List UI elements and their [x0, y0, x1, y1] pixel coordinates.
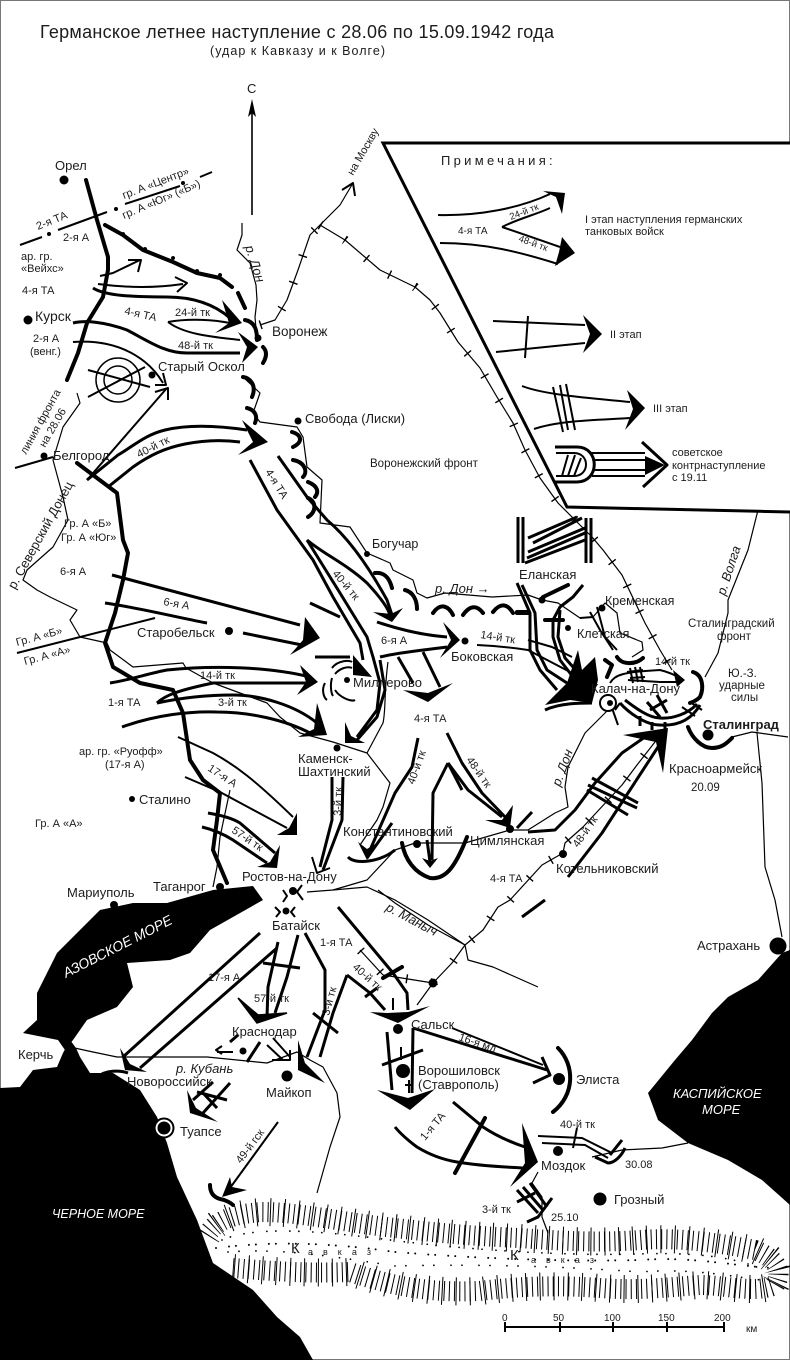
city: Elista: Элиста	[576, 1072, 620, 1087]
army and unit labels: centre: 40-й тк	[406, 749, 429, 786]
Millerovo pocket	[323, 661, 355, 701]
army and unit labels: north: 24-й тк	[175, 307, 210, 319]
front lines and army-group boundaries	[15, 172, 245, 883]
army and unit labels: centre: 17-я А	[205, 762, 240, 790]
army and unit labels: south: 40-й тк	[560, 1119, 595, 1131]
legend: stage I: 4-я ТА	[458, 226, 488, 237]
city: Krasnodar: Краснодар	[232, 1024, 297, 1039]
city: Tuapse: Туапсе	[180, 1124, 222, 1139]
city: Kamensk-Shakhtinsky	[298, 744, 371, 779]
city: Voroshilovsk	[396, 1063, 500, 1092]
city: Elanskaya: Еланская	[519, 567, 576, 582]
legend: stage I: 48-й тк	[517, 233, 550, 254]
city: Kalach-on-Don	[591, 681, 681, 711]
army and unit labels: north: Воронежский фронт	[370, 458, 479, 470]
city: Tsimlyanskaya	[470, 825, 544, 848]
army and unit labels: north: (венг.)	[30, 346, 61, 358]
army and unit labels: Stalingrad area: ударные	[719, 680, 765, 692]
legend: Soviet counter-offensive: с 19.11	[672, 472, 707, 484]
legend: stage II	[493, 315, 642, 358]
army and unit labels: south: 25.10	[551, 1212, 579, 1224]
legend: stage III	[522, 384, 688, 432]
legend: Soviet counter-offensive: советское	[672, 447, 723, 459]
railways	[260, 183, 672, 1005]
sea labels: АЗОВСКОЕ МОРЕ	[59, 911, 175, 981]
arrow: 16th motorised division to Elista	[413, 1028, 570, 1112]
legend heading: Примечания:	[441, 153, 556, 168]
Caucasus labels: авказ	[531, 1255, 604, 1265]
army and unit labels: north: гр. А «Юг» («Б»)	[120, 178, 202, 222]
scale bar: км	[746, 1324, 757, 1335]
army and unit labels: south: 16-я мд	[457, 1031, 498, 1056]
army and unit labels: south: 57-й тк	[254, 993, 289, 1005]
city: Bataysk	[272, 908, 320, 933]
arrow: 40th corps at Mozdok	[538, 1128, 625, 1163]
army and unit labels: north: 2-я ТА	[35, 209, 70, 233]
army and unit labels: south: 40-й тк	[350, 961, 384, 994]
army and unit labels: north: «Вейхс»	[21, 263, 64, 275]
Caucasus labels: К	[510, 1247, 519, 1264]
arrow: 40th panzer corps	[87, 420, 268, 487]
city: Stary Oskol: Старый Оскол	[158, 359, 245, 374]
scale bar: 150	[658, 1313, 675, 1324]
army and unit labels: south: 1-я ТА	[320, 937, 353, 949]
arrows: 40th corps and pocket at Konstantinovsky	[348, 738, 467, 878]
Caucasus labels	[291, 1240, 604, 1265]
Caspian Sea	[648, 950, 790, 1205]
city: Mozdok: Моздок	[541, 1158, 586, 1173]
army and unit labels: Stalingrad area: фронт	[717, 631, 752, 643]
city: Kalach-on-Don: Калач-на-Дону	[591, 681, 681, 696]
army and unit labels: centre: 40-й тк	[330, 568, 361, 603]
city: Stalingrad: Сталинград	[703, 717, 780, 732]
city: Astrakhan	[697, 938, 786, 954]
Soviet counter-offensive from Elanskaya	[517, 517, 643, 710]
Sea of Azov	[23, 886, 263, 1050]
army and unit labels: north: 2-я А	[33, 333, 60, 345]
army and unit labels: centre: 4-я ТА	[490, 873, 523, 885]
army and unit labels: centre: 48-й тк	[464, 755, 494, 791]
army and unit labels: Stalingrad area: 14-й тк	[480, 629, 516, 646]
scale bar: 200	[714, 1313, 731, 1324]
city: Kamensk-Shakhtinsky: Шахтинский	[298, 764, 371, 779]
river labels: р. Северский Донец	[5, 478, 76, 591]
army and unit labels: centre: Гр. А «Б»	[64, 518, 111, 530]
city: Mariupol	[67, 885, 135, 909]
city: Grozny: Грозный	[614, 1192, 664, 1207]
arrows: 6th army	[105, 575, 320, 655]
arrow: 3rd corps south of Mozdok	[517, 1183, 552, 1222]
city: Bataysk: Батайск	[272, 918, 320, 933]
city: Krasnoarmeysk	[669, 761, 762, 794]
city: Salsk	[393, 1017, 455, 1034]
army and unit labels: south: 1-я ТА	[418, 1110, 449, 1143]
destroyed Soviet pocket near Stary Oskol	[88, 358, 150, 402]
legend: stage III: III этап	[653, 403, 688, 415]
river labels: р. Кубань	[175, 1061, 233, 1076]
river labels: р. Волга	[713, 544, 744, 598]
city: Rostov-on-Don: Ростов-на-Дону	[242, 869, 337, 884]
arrow: 1st panzer army to Mozdok	[395, 1102, 538, 1187]
city: Salsk: Сальск	[411, 1017, 455, 1032]
army and unit labels: north: на 28.06	[37, 406, 69, 450]
north arrow	[247, 81, 256, 215]
legend: stage II: II этап	[610, 329, 642, 341]
army and unit labels: south: 49-й гск	[234, 1127, 267, 1166]
city: Krasnodar	[232, 1024, 297, 1054]
Black Sea	[0, 1040, 313, 1360]
army and unit labels: north: 4-я ТА	[22, 285, 55, 297]
army and unit labels: centre: Гр. А «А»	[23, 644, 72, 668]
legend: stage I: 24-й тк	[508, 201, 541, 223]
army and unit labels: centre: ар. гр. «Руофф»	[79, 746, 163, 758]
city: Novorossiysk	[98, 1071, 212, 1089]
title: (удар к Кавказу и к Волге)	[210, 44, 385, 58]
city: Maykop	[266, 1070, 312, 1100]
legend: Soviet counter-offensive	[555, 442, 765, 487]
city: Maykop: Майкоп	[266, 1085, 312, 1100]
Caucasus mountains	[207, 1212, 778, 1291]
army and unit labels: centre: 48-й тк	[571, 814, 601, 850]
city: Elanskaya	[519, 567, 576, 604]
army and unit labels: centre: (17-я А)	[105, 759, 145, 771]
arrows: 14th and 3rd panzer corps	[110, 665, 327, 737]
arrow: 48th corps to Krasnoarmeysk	[522, 728, 668, 917]
river labels: р. Дон	[548, 747, 576, 789]
city: Krasnoarmeysk: Красноармейск	[669, 761, 762, 776]
city: Kerch: Керчь	[18, 1047, 54, 1062]
city: Tsimlyanskaya: Цимлянская	[470, 833, 544, 848]
arrows: 4th panzer army south along the Don	[250, 456, 403, 743]
city: Konstantinovsky: Константиновский	[343, 824, 453, 839]
city: Stalingrad	[702, 717, 780, 740]
army and unit labels: centre: 6-я А	[60, 566, 87, 578]
army and unit labels: centre: Гр. А «А»	[35, 818, 83, 830]
sea labels: МОРЕ	[702, 1102, 741, 1117]
arrow: 49th mountain corps	[210, 1122, 278, 1205]
sea labels: ЧЕРНОЕ МОРЕ	[52, 1207, 145, 1221]
army and unit labels: north: 40-й тк	[135, 434, 172, 461]
army and unit labels: centre: 6-я А	[381, 635, 408, 647]
army and unit labels: north: гр. А «Центр»	[121, 165, 191, 202]
army and unit labels: south: 3-й тк	[320, 986, 339, 1017]
scale bar: 0	[502, 1313, 508, 1324]
scale bar: 50	[553, 1313, 565, 1324]
rivers	[23, 223, 788, 1233]
sea labels	[52, 911, 762, 1221]
arrow: 3rd panzer corps to Rostov	[312, 777, 343, 873]
city: Stary Oskol	[148, 359, 245, 378]
army and unit labels: centre: Гр. А «Юг»	[61, 532, 116, 544]
city: Voronezh	[254, 324, 327, 342]
city: Stalino: Сталино	[139, 792, 191, 807]
army and unit labels: centre: 57-й тк	[229, 825, 265, 854]
army and unit labels: Stalingrad area: Сталинградский	[688, 618, 775, 630]
army and unit labels: south: 30.08	[625, 1159, 653, 1171]
city: Rostov-on-Don	[242, 869, 337, 895]
army and unit labels: north	[18, 126, 479, 502]
sea labels: КАСПИЙСКОЕ	[673, 1085, 762, 1101]
city: Boguchar	[364, 537, 418, 557]
army and unit labels: south: 3-й тк	[482, 1204, 511, 1216]
army and unit labels: north: 4-я ТА	[123, 305, 158, 324]
city: Voroshilovsk: Ворошиловск	[418, 1063, 500, 1078]
army and unit labels: Stalingrad area: 14-й тк	[655, 656, 690, 668]
Caucasus labels: авказ	[308, 1247, 381, 1257]
city: Astrakhan: Астрахань	[697, 938, 760, 953]
army and unit labels: north: линия фронта	[18, 387, 64, 456]
north arrow: С	[247, 81, 256, 96]
city: Voronezh: Воронеж	[272, 324, 327, 339]
army and unit labels: centre: 6-я А	[162, 596, 191, 613]
legend panel	[383, 143, 790, 512]
encirclement at Stalingrad	[610, 667, 732, 748]
army and unit labels: centre: 1-я ТА	[108, 697, 141, 709]
city: Boguchar: Богучар	[372, 537, 418, 551]
city: Kotelnikovsky: Котельниковский	[556, 861, 658, 876]
city: Tuapse	[154, 1118, 222, 1139]
city: Belgorod: Белгород	[53, 448, 110, 463]
city: Mozdok	[541, 1146, 586, 1173]
scale bar: 100	[604, 1313, 621, 1324]
city: Starobelsk: Старобельск	[137, 625, 215, 640]
army and unit labels: south: 17-я А	[208, 972, 241, 984]
city: Bokovskaya: Боковская	[451, 649, 513, 664]
city: Svoboda: Свобода (Лиски)	[305, 411, 405, 426]
army and unit labels: north: 2-я А	[63, 232, 90, 244]
legend: stage I: танковых войск	[585, 226, 664, 238]
arrow: 48th corps to Tsimlyanskaya	[447, 733, 532, 828]
army and unit labels: north: 48-й тк	[178, 340, 213, 352]
army and unit labels: centre: 3-й тк	[218, 697, 247, 709]
army and unit labels: north: на Москву	[345, 126, 382, 178]
legend: stage I	[438, 191, 743, 266]
city: Taganrog: Таганрог	[153, 879, 206, 894]
city: Orel	[55, 158, 87, 184]
army and unit labels: Stalingrad area: Ю.-З.	[728, 668, 757, 680]
scale bar	[502, 1313, 757, 1335]
city: Kremenskaya: Кременская	[605, 594, 674, 608]
title	[40, 22, 555, 58]
city: Novorossiysk: Новороссийск	[127, 1074, 212, 1089]
army and unit labels: north: 4-я ТА	[262, 467, 290, 502]
city: Kamensk-Shakhtinsky: Каменск-	[298, 751, 353, 766]
cities	[18, 158, 786, 1207]
army and unit labels: centre: 14-й тк	[200, 670, 235, 682]
army and unit labels: north: ар. гр.	[21, 251, 53, 263]
arrow: 6th army to Bokovskaya and 4th panzer branch	[377, 622, 572, 702]
city: Kotelnikovsky	[556, 850, 658, 876]
legend: Soviet counter-offensive: контрнаступление	[672, 460, 765, 472]
arrows in the Kuban	[120, 933, 347, 1122]
city: Kursk: Курск	[35, 308, 72, 324]
army and unit labels: centre: 4-я ТА	[414, 713, 447, 725]
title: Германское летнее наступление с 28.06 по 15.09.1942 года	[40, 22, 555, 42]
legend: stage I: I этап наступления германских	[585, 214, 743, 226]
city: Bokovskaya	[451, 638, 513, 664]
German defensive arcs	[243, 320, 528, 615]
Caucasus labels: К	[291, 1240, 300, 1257]
arrows: 17th army and 57th corps to Rostov	[178, 737, 297, 868]
river labels: р. Дон	[242, 242, 268, 284]
city: Millerovo: Миллерово	[353, 675, 422, 690]
city: Konstantinovsky	[343, 824, 453, 848]
army and unit labels: centre: 3-й тк	[332, 787, 345, 816]
first-stage arrows toward Voronezh	[73, 260, 258, 480]
army and unit labels: centre: Гр. А «Б»	[15, 625, 64, 649]
city: Voroshilovsk: (Ставрополь)	[418, 1077, 499, 1092]
city: Krasnoarmeysk: 20.09	[691, 782, 720, 794]
army and unit labels: south	[208, 937, 653, 1224]
river labels	[5, 242, 744, 1076]
city: Elista	[553, 1072, 620, 1087]
river labels: р. Дон →	[434, 581, 490, 596]
river labels: р. Маныч	[383, 899, 440, 939]
army and unit labels: centre	[15, 518, 601, 885]
army and unit labels: Stalingrad area	[480, 618, 775, 704]
defence brackets at Rostov and Bataysk	[275, 885, 303, 917]
arrows: 1st panzer army to Salsk and Voroshilovsk	[338, 907, 435, 1110]
city: Mariupol: Мариуполь	[67, 885, 135, 900]
army and unit labels: Stalingrad area: силы	[731, 692, 758, 704]
city: Orel: Орел	[55, 158, 87, 173]
city: Kletskaya: Клетская	[577, 627, 629, 641]
